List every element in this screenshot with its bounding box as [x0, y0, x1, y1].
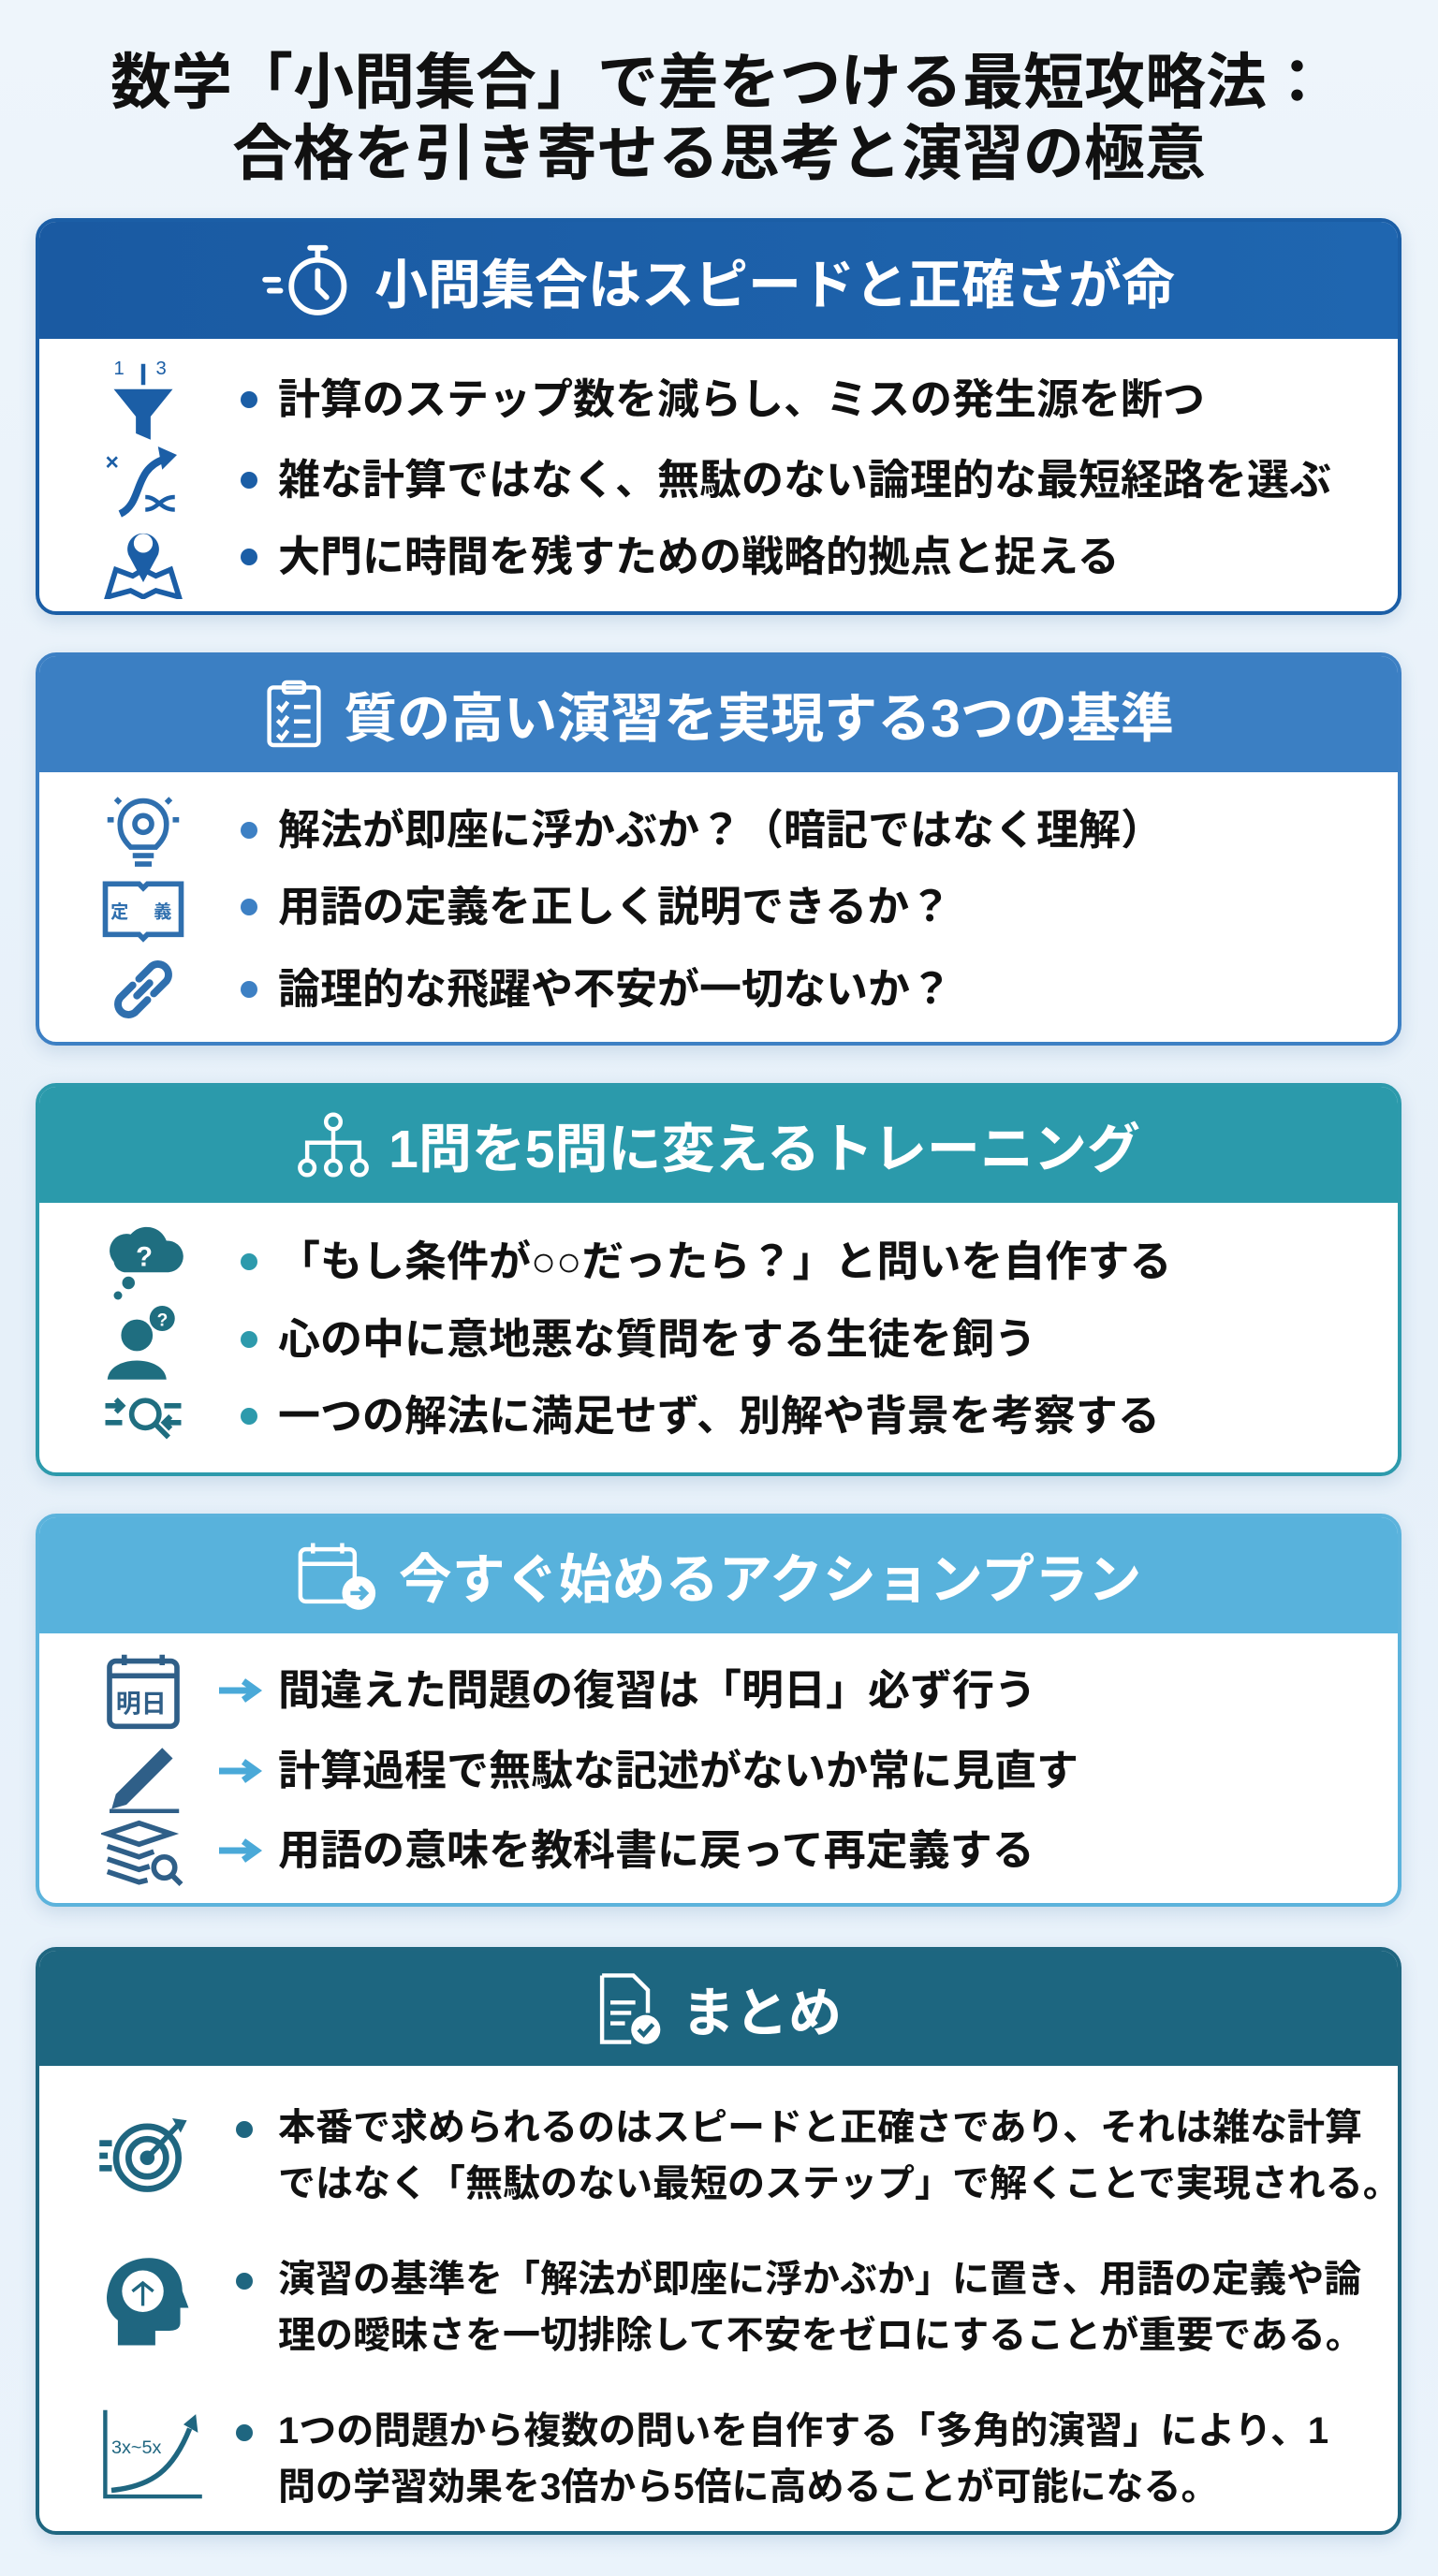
summary 3 [103, 2409, 1328, 2508]
summary 2: 演習の基準を「解法が即座に浮かぶか」に置き、用語の定義や論 [278, 2259, 1361, 2300]
summary 2 [107, 2258, 1363, 2356]
bullet 2: 心の中に意地悪な質問をする生徒を飼う [278, 1315, 1036, 1363]
bullet 3 [101, 1820, 1034, 1886]
summary 1: ではなく「無駄のない最短のステップ」で解くことで実現される。 [278, 2163, 1401, 2204]
panel: speed and accuracy: 3 [155, 359, 167, 379]
panel: 3 criteria [36, 652, 1401, 1046]
bullet 2 [105, 446, 1331, 518]
bullet 1: 計算のステップ数を減らし、ミスの発生源を断つ [278, 375, 1205, 423]
bullet 2: 定 [110, 897, 128, 923]
bullet 1 [107, 1655, 1036, 1730]
bullet 3 [104, 533, 1120, 599]
summary 2: 理の曖昧さを一切排除して不安をゼロにすることが重要である。 [278, 2315, 1363, 2356]
title [110, 48, 1328, 187]
heading: panel 2: 質の高い演習を実現する3つの基準 [344, 689, 1174, 749]
bullet 1 [107, 797, 1163, 867]
panel: summary [36, 1947, 1401, 2535]
summary 1: 本番で求められるのはスピードと正確さであり、それは雑な計算 [278, 2107, 1362, 2148]
title: 数学「小問集合」で差をつける最短攻略法： [110, 48, 1328, 116]
heading: panel 4 [39, 1517, 1398, 1633]
heading: panel 3 [39, 1087, 1398, 1203]
bullet 1 [110, 1226, 1171, 1299]
bullet 3: 用語の意味を教科書に戻って再定義する [278, 1826, 1034, 1874]
title: 合格を引き寄せる思考と演習の極意 [232, 119, 1206, 187]
bullet 1: 解法が即座に浮かぶか？（暗記ではなく理解） [278, 806, 1163, 854]
bullet 1 [114, 359, 1205, 440]
heading: summary: まとめ [682, 1983, 842, 2042]
bullet 2: ? [157, 1310, 168, 1330]
bullet 3: 一つの解法に満足せず、別解や背景を考察する [278, 1392, 1160, 1440]
bullet 2 [107, 1306, 1036, 1380]
bullet 2: 計算過程で無駄な記述がないか常に見直す [278, 1747, 1078, 1794]
summary 1 [99, 2107, 1401, 2204]
heading: panel 1 [39, 222, 1398, 339]
heading: panel 2 [39, 656, 1398, 772]
bullet 1: 間違えた問題の復習は「明日」必ず行う [278, 1666, 1036, 1714]
bullet 2 [110, 1747, 1078, 1813]
heading: summary [39, 1951, 1398, 2066]
summary 3: 3x~5x [111, 2437, 161, 2458]
panel: training [36, 1083, 1401, 1476]
bullet 2: 用語の定義を正しく説明できるか？ [278, 883, 951, 930]
panel: speed and accuracy [36, 218, 1401, 615]
bullet 1: 「もし条件が○○だったら？」と問いを自作する [278, 1237, 1171, 1285]
bullet 3 [114, 960, 952, 1018]
panel: action plan [36, 1514, 1401, 1907]
bullet 1: ? [136, 1243, 153, 1273]
panel: speed and accuracy: 1 [114, 359, 125, 379]
bullet 1: 明日 [116, 1684, 167, 1720]
heading: panel 4: 今すぐ始めるアクションプラン [399, 1550, 1141, 1610]
bullet 3: 大門に時間を残すための戦略的拠点と捉える [278, 533, 1120, 580]
bullet 2: 雑な計算ではなく、無駄のない論理的な最短経路を選ぶ [278, 456, 1331, 504]
bullet 2: × [105, 450, 119, 476]
summary 3: 問の学習効果を3倍から5倍に高めることが可能になる。 [278, 2466, 1219, 2508]
bullet 3: 論理的な飛躍や不安が一切ないか？ [278, 965, 952, 1013]
bullet 2 [103, 882, 951, 943]
heading: panel 3: 1問を5問に変えるトレーニング [389, 1120, 1140, 1179]
bullet 2: 義 [154, 897, 171, 923]
heading: panel 1: 小問集合はスピードと正確さが命 [374, 255, 1175, 315]
summary 3: 1つの問題から複数の問いを自作する「多角的演習」により、1 [278, 2410, 1328, 2452]
